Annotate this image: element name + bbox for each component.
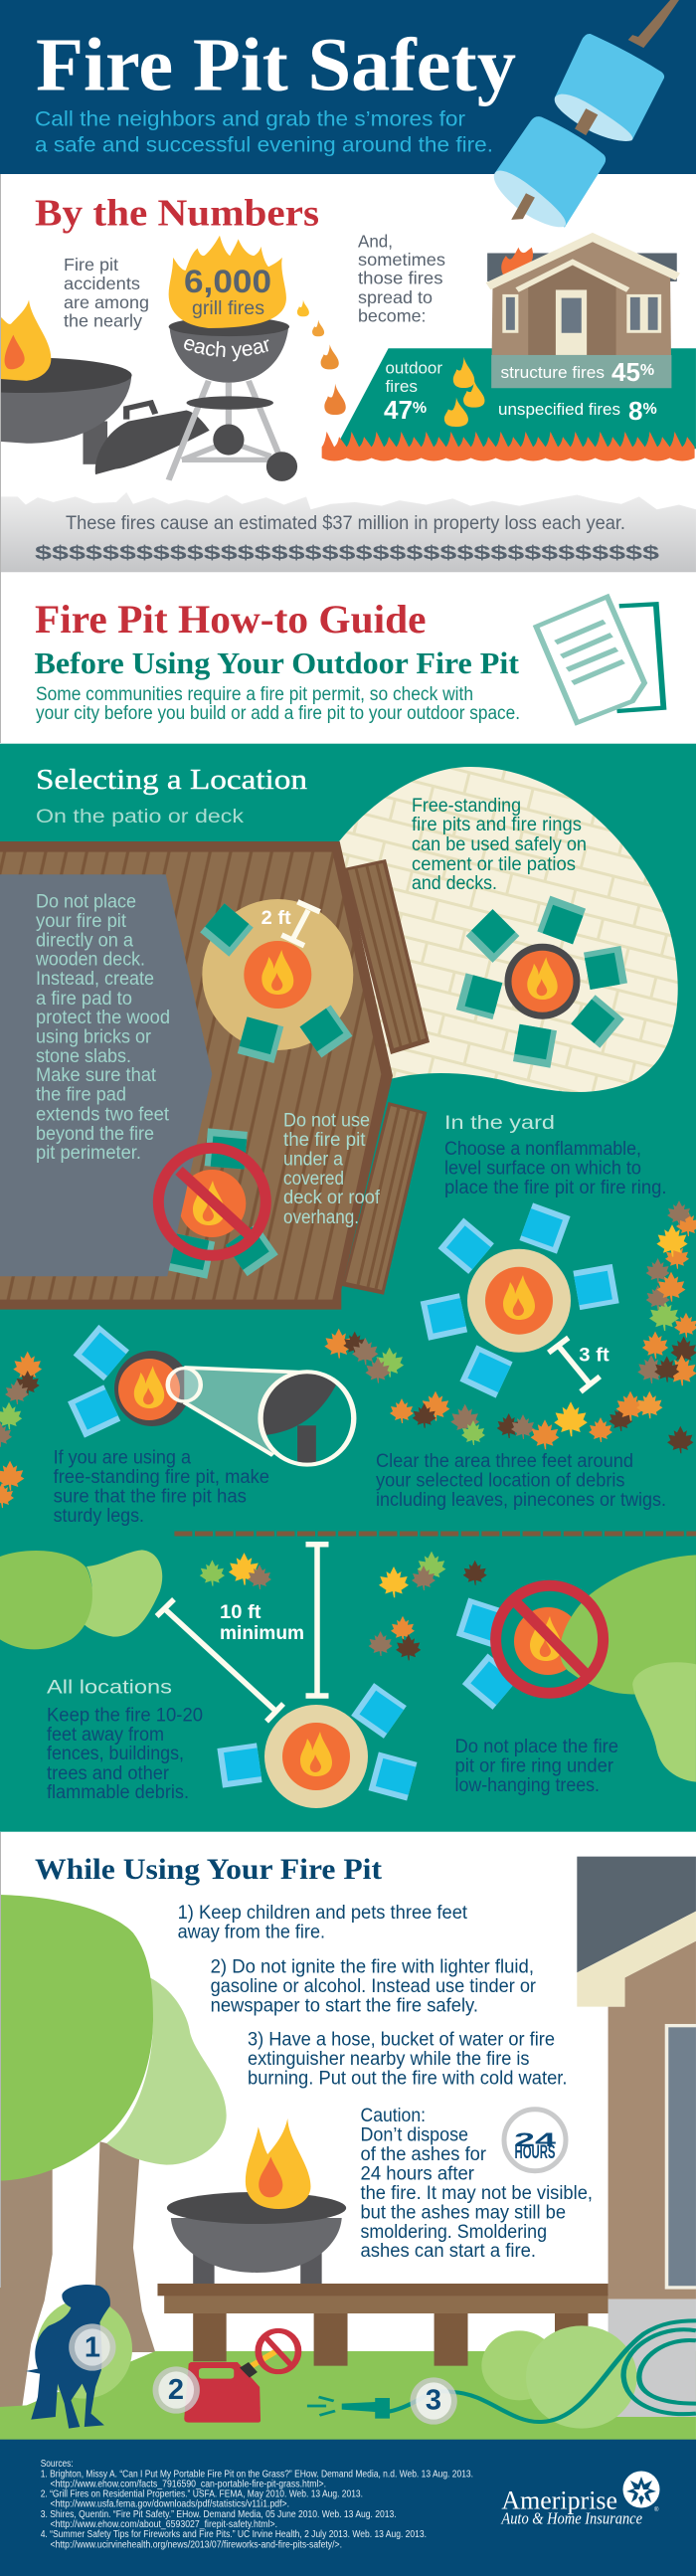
- logo: Ameriprise Auto & Home Insurance: Ameriprise: [501, 2486, 617, 2515]
- illustration: grill, fire pit, flames: [0, 236, 346, 481]
- left edge line: [0, 174, 2, 2288]
- text: step 3: [248, 2030, 567, 2090]
- text: free-standing fire pits: and decks.: [412, 873, 497, 894]
- text: do not use under covered deck: [283, 1111, 381, 1228]
- text: caution: [360, 2106, 593, 2262]
- text: caution: the fire. It may not be visible,: [360, 2183, 593, 2204]
- text: do not place on deck: stone slabs.: [36, 1046, 131, 1067]
- text: property loss: These fires cause an estimated $37 million in property loss each year.: [66, 513, 625, 534]
- text: sturdy legs: [54, 1448, 269, 1527]
- text: do not place on deck: protect the wood: [36, 1008, 170, 1028]
- heading: Fire Pit How-to Guide: Fire Pit How-to Guide: [35, 597, 427, 642]
- text: and sometimes those fires spread: sometimes: [358, 250, 445, 270]
- icon: house: [487, 238, 678, 388]
- text: sources: <http://www.usfa.fema.gov/downloads/pdf/statistics/v11i1.pdf>.: [50, 2499, 289, 2510]
- text: free-standing fire pits: cement or tile patios: [412, 854, 576, 875]
- text: caution: of the ashes for: [360, 2144, 487, 2165]
- text: do not place on deck: your fire pit: [36, 911, 127, 932]
- icon: bushes at house: [481, 2325, 637, 2429]
- icon: gas can with prohibition: [184, 2330, 298, 2423]
- stat: 6,000 grill fires each year: 6,000: [184, 264, 271, 299]
- text: step 2: [211, 1957, 537, 2017]
- panel: property loss band: [0, 492, 696, 572]
- text: free-standing fire pits: [412, 796, 587, 894]
- icon: bush behind dog: [37, 2300, 132, 2399]
- fence: [174, 1532, 696, 1536]
- lower side platform: [342, 1102, 427, 1295]
- icon: fire pit under overhang, prohibited (pit and chairs): [168, 1128, 278, 1279]
- logo: Ameriprise Auto & Home Insurance: Auto & Home Insurance: [501, 2509, 642, 2528]
- heading: By the Numbers: By the Numbers: [35, 192, 319, 234]
- text: do not place on deck: Make sure that: [36, 1065, 157, 1086]
- text: and sometimes those fires spread: those fires: [358, 269, 443, 288]
- text: do not place on deck: [35, 892, 170, 1164]
- subtitle: a safe and successful evening around the fire.: [35, 132, 493, 156]
- text: sturdy legs: free-standing fire pit, make: [54, 1467, 269, 1488]
- text: sources: 2. “Grill Fires on Residential Properties.” USFA. FEMA, May 2010. Web. 13 Aug. 2013.: [41, 2489, 363, 2500]
- subheading: Before Using Your Outdoor Fire Pit: Before Using Your Outdoor Fire Pit: [34, 646, 520, 680]
- text: do not place on deck: the fire pad: [36, 1085, 126, 1106]
- text: do not place on deck: Do not place: [36, 892, 136, 913]
- text: and sometimes those fires spread: become:: [358, 306, 426, 326]
- illustration: burning house and lawn: [322, 238, 696, 460]
- panel: footer: [0, 2440, 696, 2576]
- text: low-hanging trees: Do not place the fire: [455, 1737, 618, 1757]
- text: sources: Sources:: [41, 2459, 74, 2470]
- heading: In the yard: In the yard: [444, 1113, 555, 1134]
- stat: structure fires 45%: [501, 357, 654, 387]
- stat: unspecified fires 8%: unspecified fires: [498, 400, 620, 419]
- badge numbers: 1: [85, 2331, 100, 2363]
- text: sturdy legs: sturdy legs.: [54, 1506, 144, 1527]
- text: caution: but the ashes may still be: [360, 2203, 566, 2224]
- stat: structure fires 45%: 45: [611, 357, 640, 387]
- panel: selecting a location background: [0, 744, 696, 1832]
- icon: 10 ft minimum clearance rulers: 10 ft: [220, 1602, 261, 1623]
- text: step 1: 1) Keep children and pets three feet: [178, 1903, 468, 1924]
- stat: outdoor fires 47%: fires: [386, 378, 418, 396]
- text: sources: <http://www.ucirvinehealth.org/news/2013/07/fireworks-and-fire-pits-safety/>.: [50, 2539, 342, 2550]
- text: step 1: away from the fire.: [178, 1923, 325, 1943]
- text: do not place on deck: wooden deck.: [35, 950, 145, 971]
- icon: all locations fire pit: [217, 1683, 417, 1808]
- header band: [0, 0, 696, 174]
- text: keep the fire away: fences, buildings,: [47, 1744, 184, 1764]
- panel: gray roof overhang: [0, 874, 212, 1276]
- text: fire pit accidents: are among: [64, 292, 149, 312]
- text: do not place on deck: a fire pad to: [36, 989, 132, 1010]
- text: do not use under covered deck: overhang.: [283, 1207, 359, 1228]
- subtitle: [35, 107, 493, 156]
- icon: 24 hours clock: 24: [514, 2130, 557, 2151]
- icon: dog: [26, 2285, 110, 2429]
- text: keep the fire away: flammable debris.: [47, 1782, 189, 1803]
- text: do not place on deck: pit perimeter.: [36, 1143, 141, 1164]
- icon: yard fire pit with 3 ft clearance: [421, 1202, 619, 1398]
- text: fire pit accidents: accidents: [64, 274, 140, 293]
- text: sources: 1. Brighton, Missy A. “Can I Put My Portable Fire Pit on the Grass?” EHow. Demand Media, n.d. Web. 13 Aug. 2013.: [41, 2469, 473, 2480]
- heading: All locations: All locations: [47, 1678, 172, 1699]
- stat: structure fires 45%: %: [640, 362, 654, 379]
- text: sources: <http://www.ehow.com/facts_7916590_can-portable-fire-pit-grass.html>.: [50, 2479, 326, 2489]
- text: fire pit accidents: Fire pit: [64, 255, 118, 275]
- text: caution: Don’t dispose: [360, 2125, 468, 2146]
- text: do not place on deck: beyond the fire: [36, 1124, 154, 1145]
- stat: 6,000 grill fires each year: each year: [184, 339, 268, 362]
- number badges: [69, 2323, 457, 2425]
- text: step 2: gasoline or alcohol. Instead use tinder or: [211, 1976, 537, 1997]
- icon: 10 ft minimum clearance rulers: [157, 1545, 328, 1722]
- icon: left bushes: [0, 1550, 162, 1649]
- logo: Ameriprise Auto & Home Insurance: [501, 2471, 660, 2528]
- text: free-standing fire pits: can be used safely on: [412, 834, 587, 855]
- icon: house wall and roof: [577, 1857, 696, 2300]
- grass: [0, 2351, 696, 2440]
- stat: outdoor fires 47%: [384, 360, 443, 425]
- icon: fire pad with 2 ft clearance: [200, 899, 353, 1063]
- text: keep the fire away: trees and other: [47, 1763, 170, 1784]
- text: step 3: burning. Put out the fire with cold water.: [248, 2069, 567, 2090]
- stat: unspecified fires 8%: 8: [628, 396, 642, 426]
- icon: marshmallows on a stick: [494, 0, 679, 228]
- text: do not use under covered deck: the fire pit: [283, 1130, 366, 1151]
- icon: 10 ft minimum clearance rulers: minimum: [220, 1623, 304, 1644]
- text: free-standing fire pits: fire pits and fire rings: [412, 815, 582, 835]
- subtitle: Call the neighbors and grab the s’mores for: [35, 107, 465, 131]
- text: do not place on deck: using bricks or: [36, 1027, 152, 1048]
- stat: structure fires 45%: structure fires: [501, 363, 605, 382]
- text: choose a nonflammable surface: [444, 1139, 666, 1198]
- text: fire pit accidents: the nearly: [64, 310, 142, 330]
- text: step 1: [178, 1903, 468, 1943]
- text: step 3: 3) Have a hose, bucket of water or fire: [248, 2030, 555, 2051]
- icon: garden hose: [307, 2320, 696, 2422]
- text: step 2: 2) Do not ignite the fire with lighter fluid,: [211, 1957, 534, 1978]
- text: sources: 3. Shires, Quentin. “Fire Pit Safety.” EHow. Demand Media, 05 June 2010. Web. 13 Aug. 2013.: [41, 2509, 397, 2520]
- text: sturdy legs: sure that the fire pit has: [54, 1487, 247, 1508]
- icon: fire pad with 2 ft clearance: 2 ft: [261, 908, 291, 929]
- upper side platform: [344, 859, 430, 1054]
- text: choose a nonflammable surface: Choose a nonflammable,: [444, 1139, 641, 1160]
- icon: ground flames: [322, 432, 695, 460]
- text: caution: Caution:: [360, 2106, 426, 2126]
- text: sources: <http://www.ehow.com/about_6593027_firepit-safety.html>.: [50, 2519, 277, 2530]
- text: and sometimes those fires spread: And,: [358, 232, 393, 252]
- icon: prohibition sign over overhang: [158, 1148, 265, 1255]
- icon: free-standing pit with magnified leg: [68, 1325, 354, 1465]
- text: permit note: [36, 684, 520, 724]
- icon: grill: [169, 236, 297, 481]
- text: permit note: your city before you build or add a fire pit to your outdoor space.: [36, 703, 520, 724]
- text: keep the fire away: [47, 1706, 203, 1803]
- icon: tree trunks: [0, 2141, 155, 2407]
- text: clear the area: Clear the area three feet around: [376, 1451, 633, 1472]
- logo: Ameriprise Auto & Home Insurance: ®: [654, 2506, 659, 2513]
- badge numbers: 3: [426, 2385, 441, 2417]
- text: and sometimes those fires spread: spread to: [358, 287, 433, 307]
- text: keep the fire away: feet away from: [47, 1725, 164, 1746]
- text: sources: [41, 2459, 473, 2550]
- icon: 24 hours clock: [504, 2110, 566, 2171]
- stat: unspecified fires 8%: %: [642, 401, 657, 418]
- text: fire pit accidents: [64, 255, 149, 330]
- subheading: On the patio or deck: On the patio or deck: [36, 807, 245, 828]
- text: do not use under covered deck: covered: [283, 1169, 344, 1190]
- text: low-hanging trees: pit or fire ring under: [455, 1756, 614, 1777]
- illustration: wooden deck: [0, 841, 430, 1310]
- icon: tree canopies: [0, 1895, 227, 2181]
- icon: pit under low tree, prohibited: [456, 1555, 696, 1782]
- text: low-hanging trees: [455, 1737, 618, 1796]
- text: caution: smoldering. Smoldering: [360, 2222, 547, 2243]
- icon: wooden table: [157, 2284, 609, 2366]
- text: caution: 24 hours after: [360, 2164, 475, 2185]
- icon: 24 hours clock: HOURS: [515, 2142, 555, 2163]
- text: do not place on deck: directly on a: [36, 931, 133, 952]
- illustration: stone patio: [339, 767, 678, 1092]
- text: clear the area: your selected location of debris: [376, 1471, 624, 1492]
- text: sturdy legs: If you are using a: [54, 1448, 191, 1469]
- text: do not use under covered deck: Do not use: [283, 1111, 370, 1132]
- house foundation: [609, 2300, 696, 2417]
- text: clear the area: including leaves, pinecones or twigs.: [376, 1490, 666, 1511]
- text: sources: 4. “Summer Safety Tips for Fireworks and Fire Pits.” UC Irvine Health, 2 July 2013. Web. 13 Aug. 2013.: [41, 2529, 427, 2540]
- text: clear the area: [376, 1451, 666, 1511]
- icon: yard fire pit with 3 ft clearance: 3 ft: [579, 1345, 609, 1366]
- text: caution: ashes can start a fire.: [360, 2241, 536, 2262]
- icon: fire pit on table: [167, 2118, 346, 2284]
- text: choose a nonflammable surface: place the fire pit or fire ring.: [444, 1178, 666, 1198]
- title: Fire Pit Safety: [36, 24, 516, 107]
- stat: 6,000 grill fires each year: grill fires: [192, 298, 264, 319]
- stat: outdoor fires 47%: outdoor: [386, 360, 443, 378]
- icon: scattered leaves: [0, 1200, 696, 1660]
- stat: outdoor fires 47%: 47: [384, 395, 413, 425]
- text: do not use under covered deck: under a: [283, 1150, 343, 1171]
- heading: Selecting a Location: Selecting a Location: [36, 764, 308, 796]
- text: do not use under covered deck: deck or roof: [283, 1188, 381, 1208]
- badge numbers: 2: [168, 2374, 184, 2406]
- icon: patio fire pit: [456, 896, 627, 1068]
- illustration: backyard scene: [0, 1857, 696, 2440]
- text: do not place on deck: extends two feet: [36, 1105, 170, 1126]
- heading: While Using Your Fire Pit: While Using Your Fire Pit: [35, 1853, 382, 1886]
- badge numbers: [85, 2331, 441, 2417]
- text: do not place on deck: Instead, create: [36, 969, 154, 990]
- text: step 2: newspaper to start the fire safely.: [211, 1996, 478, 2017]
- text: step 3: extinguisher nearby while the fire is: [248, 2049, 529, 2070]
- stat: outdoor fires 47%: %: [413, 400, 427, 417]
- icon: yellow lawn flames: [444, 357, 484, 427]
- dollar signs row: $$$$$$$$$$$$$$$$$$$$$$$$$$$$$$$$$$$$$: [35, 543, 660, 564]
- icon: small flying flames: [297, 300, 346, 415]
- text: low-hanging trees: low-hanging trees.: [455, 1775, 600, 1796]
- stat: 6,000 grill fires each year: [184, 264, 271, 362]
- text: keep the fire away: Keep the fire 10-20: [47, 1706, 203, 1727]
- icon: left fire pit: [0, 299, 132, 464]
- icon: permit documents: [536, 597, 663, 723]
- icon: grill lid: [95, 403, 210, 474]
- text: permit note: Some communities require a fire pit permit, so check with: [36, 684, 473, 705]
- text: choose a nonflammable surface: level surface on which to: [444, 1159, 641, 1180]
- text: free-standing fire pits: Free-standing: [412, 796, 521, 817]
- stat: unspecified fires 8%: [498, 396, 657, 426]
- text: and sometimes those fires spread: [358, 232, 445, 326]
